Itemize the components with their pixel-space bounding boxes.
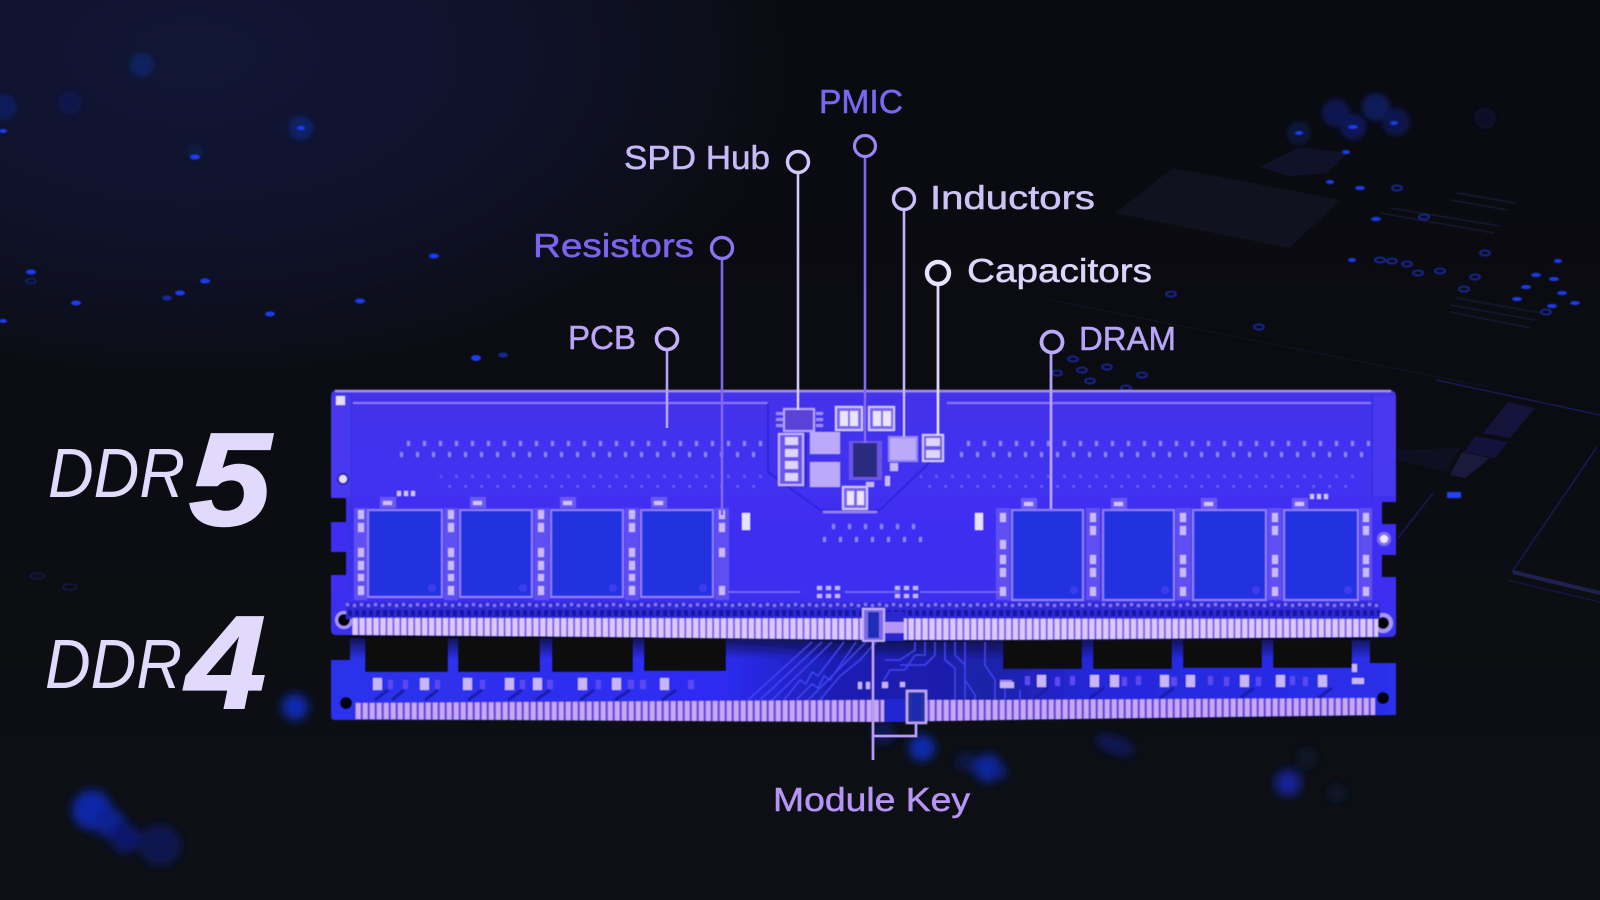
- solder dot rows: [400, 440, 1375, 543]
- title: DDR4: 4: [183, 589, 266, 736]
- PMIC capacitor bank: [779, 434, 803, 485]
- DDR4 board: [331, 638, 1396, 722]
- DDR5 module key notch: [863, 609, 904, 641]
- PMIC zone outline: [768, 403, 930, 510]
- DDR4 gold contacts: [355, 698, 1375, 722]
- SPD hub chip: [776, 409, 823, 431]
- callout: DRAM: [1042, 320, 1176, 509]
- DDR4 module: [331, 637, 1396, 723]
- corner marker: [336, 396, 345, 405]
- callout: DRAM: DRAM: [1079, 320, 1176, 357]
- callout: Resistors: [533, 227, 732, 515]
- title: DDR5: 5: [189, 406, 273, 553]
- DDR4 mounting holes: [340, 692, 1389, 709]
- callout: Module Key: Module Key: [773, 781, 971, 818]
- title: DDR5: [48, 406, 273, 553]
- callout: PMIC: PMIC: [819, 83, 903, 120]
- DDR4 routed traces: [748, 642, 1020, 700]
- chip corner marks: [428, 584, 1352, 594]
- callout: Capacitors: Capacitors: [967, 252, 1152, 289]
- background chip shapes: [0, 147, 1600, 602]
- title: DDR5: DDR: [48, 434, 185, 512]
- callout: SPD Hub: [624, 139, 808, 410]
- callout: PCB: PCB: [568, 319, 636, 356]
- callout: Resistors: Resistors: [533, 227, 694, 264]
- PMIC chip: [849, 441, 882, 480]
- DDR4 dark trace stubs: [375, 688, 1332, 700]
- callout: Inductors: [894, 179, 1095, 437]
- top pads over DRAM chips: [380, 491, 1328, 509]
- mounting holes: [335, 473, 1393, 633]
- DDR4 memory chips (dark, shadowed): [365, 638, 1352, 672]
- callout: PMIC: [819, 83, 903, 443]
- PMIC inductors: [806, 432, 917, 487]
- DDR5 via band: [346, 602, 1380, 619]
- DDR5 gold contacts: [352, 618, 1378, 640]
- DDR4 small components: [373, 664, 1364, 690]
- board edge highlight: [335, 390, 1391, 392]
- tiny PMIC passives: [866, 463, 898, 487]
- resistor columns beside DRAM: [354, 491, 1372, 600]
- callout: Capacitors: [927, 252, 1152, 435]
- PMIC top capacitor pairs: [836, 407, 894, 430]
- callout: PCB: [568, 319, 678, 428]
- title: DDR4: DDR: [45, 625, 182, 703]
- DDR4 module key notch: [907, 691, 926, 723]
- callout: Module Key: [773, 641, 971, 818]
- callout: Inductors: Inductors: [930, 179, 1095, 216]
- small white capacitors: [742, 513, 983, 530]
- capacitor pair below PMIC: [843, 487, 867, 509]
- DDR5 board: [331, 390, 1396, 640]
- shadow under the DDR5 module: [350, 637, 1370, 659]
- DRAM chips: [368, 510, 1358, 600]
- DDR5 module: [331, 390, 1396, 641]
- lower centre traces and pad clusters: [728, 586, 1000, 598]
- callout: SPD Hub: SPD Hub: [624, 139, 770, 176]
- title: DDR4: [45, 589, 266, 736]
- capacitor block right of PMIC: [923, 435, 943, 461]
